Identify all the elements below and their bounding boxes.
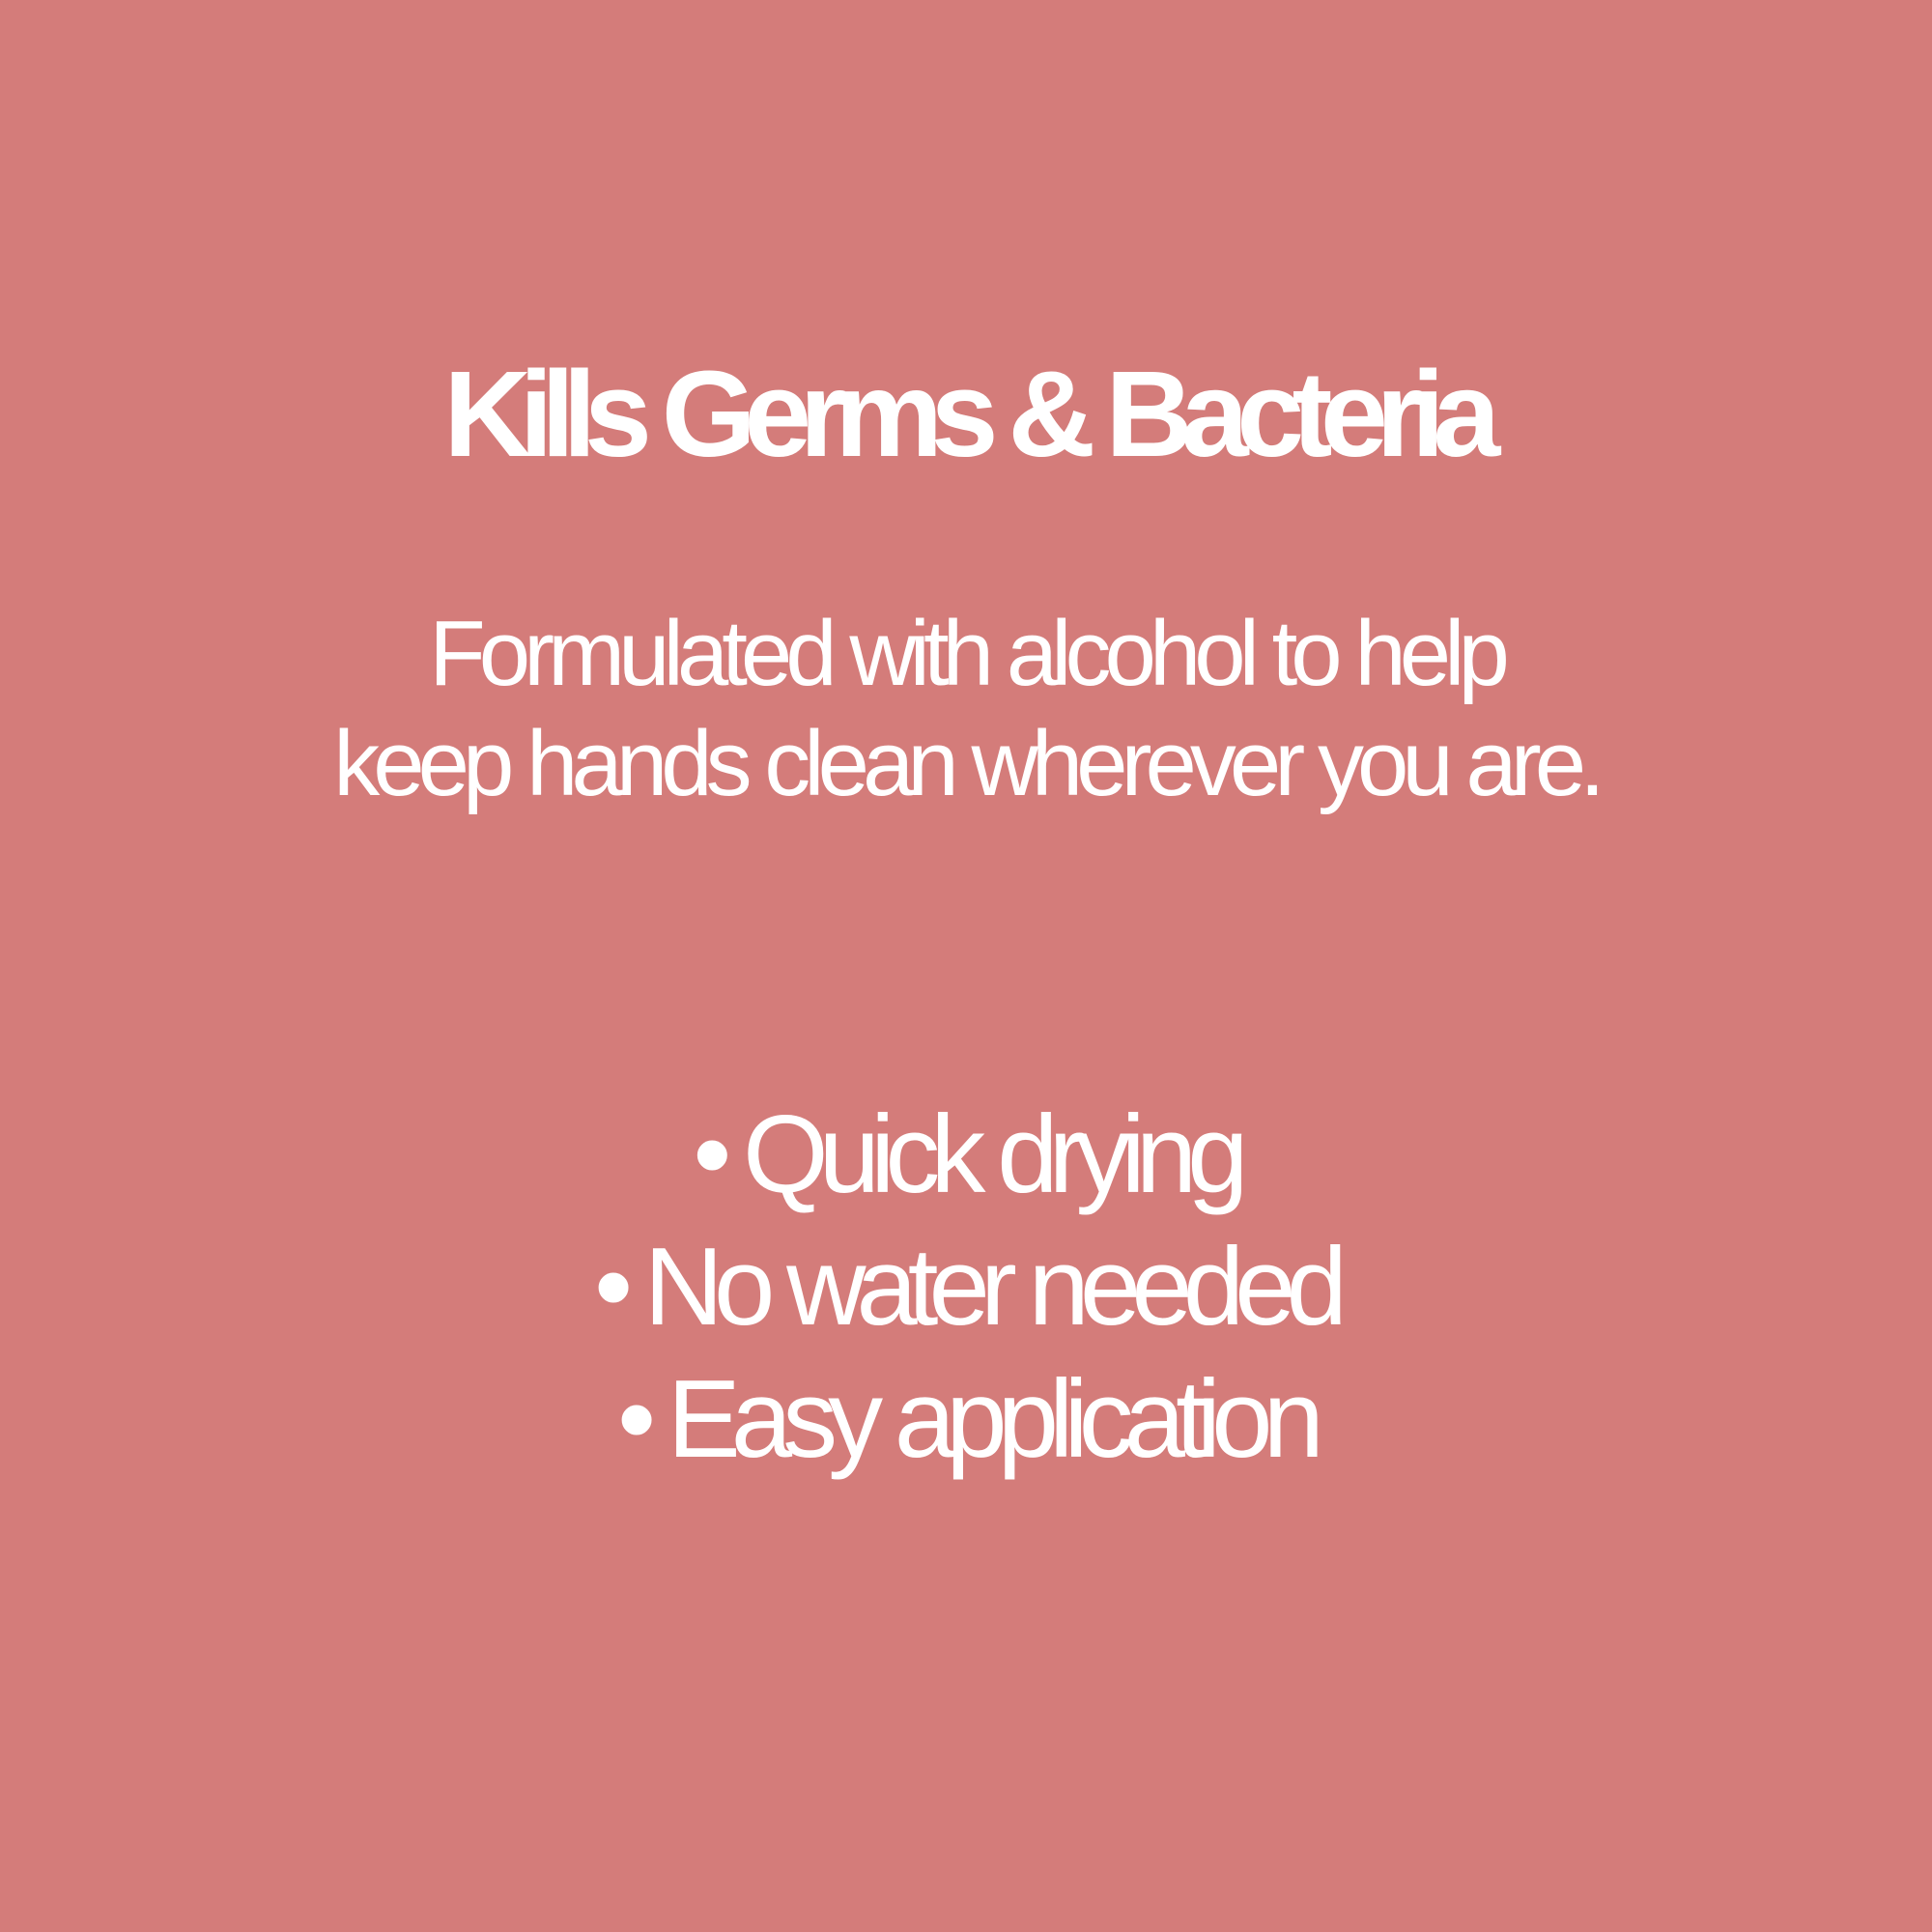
bullet: no water needed: • No water needed bbox=[594, 1226, 1338, 1349]
bullet list bbox=[594, 1094, 1341, 1481]
bullet: quick drying: • Quick drying bbox=[693, 1094, 1239, 1216]
subtitle text block bbox=[333, 602, 1599, 815]
subtitle text block: Formulated with alcohol to help bbox=[429, 602, 1503, 705]
title: Kills Germs & Bacteria bbox=[443, 346, 1489, 482]
subtitle text block: keep hands clean wherever you are. bbox=[333, 712, 1599, 815]
bullet: easy application: • Easy application bbox=[617, 1358, 1315, 1481]
